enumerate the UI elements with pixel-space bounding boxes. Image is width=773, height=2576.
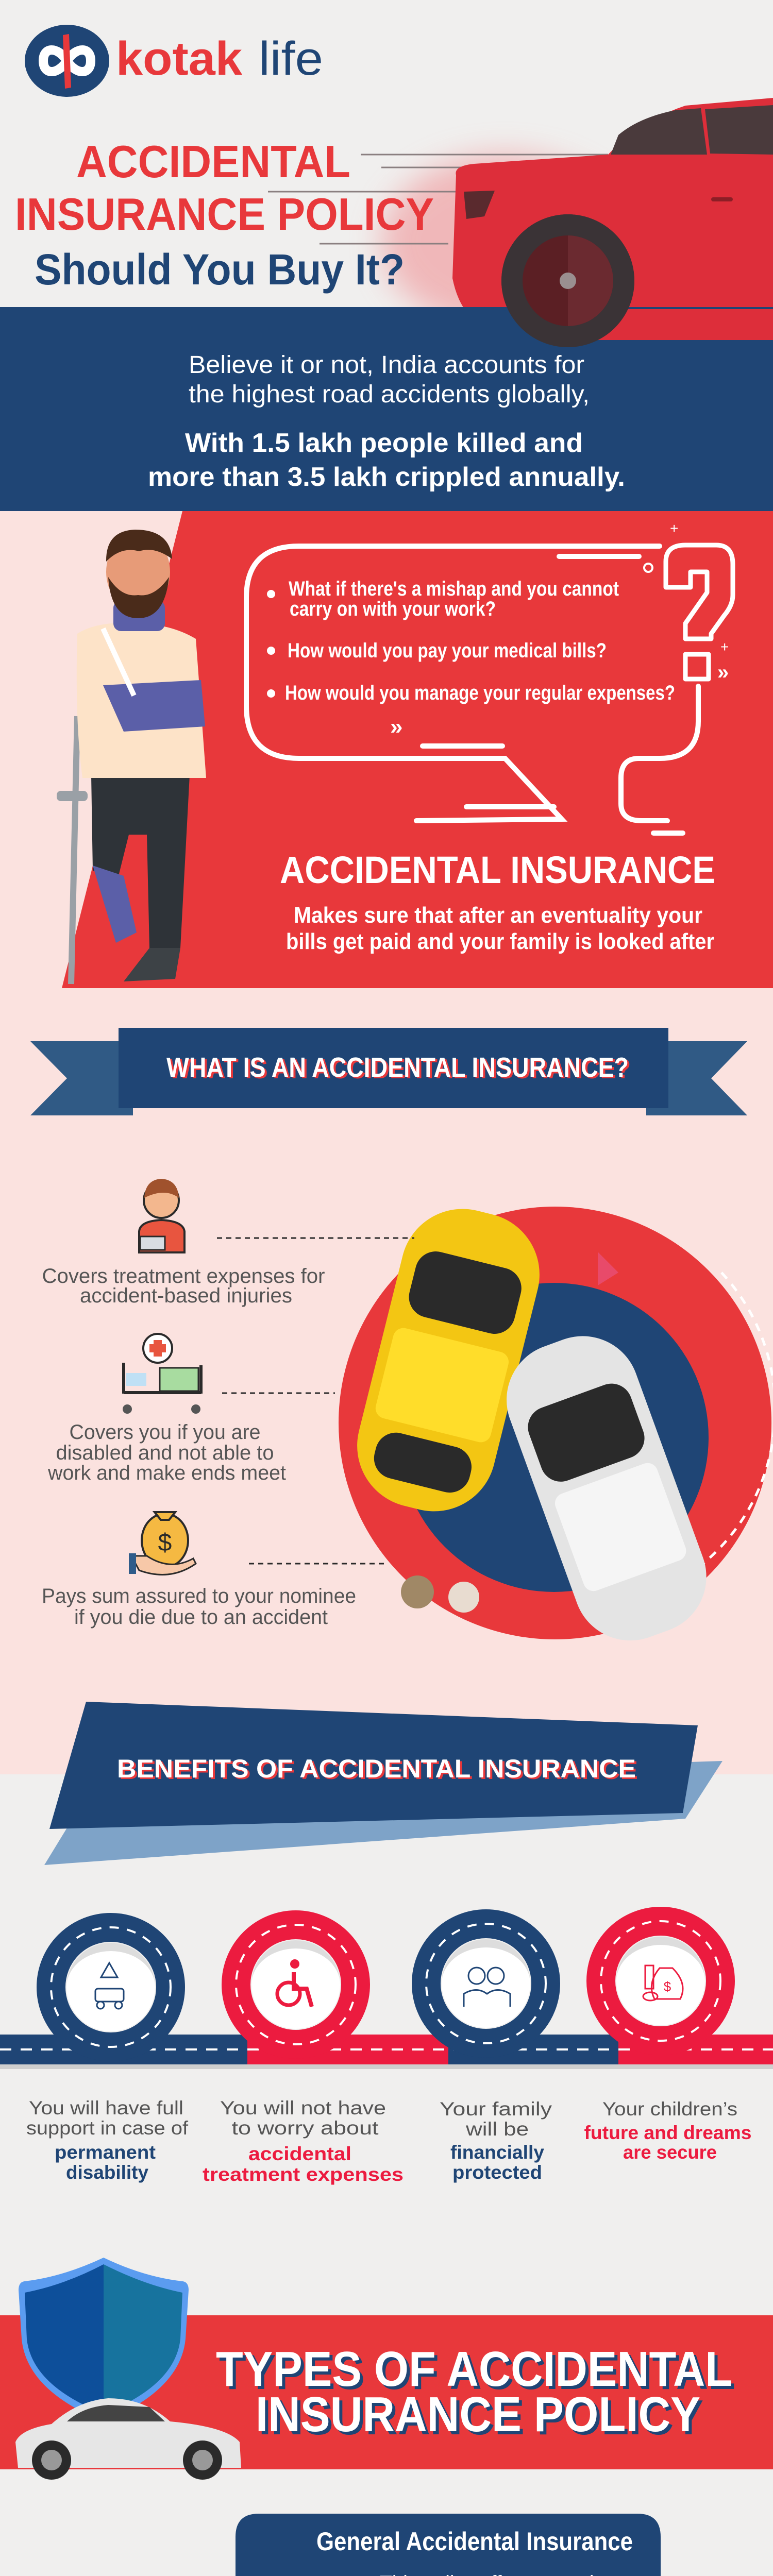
heading: benefits banner: BENEFITS OF ACCIDENTAL INSURANCE: [119, 1756, 638, 1785]
icon: hospital bed: [123, 1334, 201, 1414]
ribbon heading: what is an accidental insurance: WHAT IS AN ACCIDENTAL INSURANCE?: [166, 1052, 629, 1083]
re-draw car wheel over band: [501, 214, 773, 347]
heading: benefits banner: [44, 1702, 722, 1865]
benefit texts: future and dreams: [584, 2122, 751, 2143]
benefit texts: accidental: [248, 2143, 351, 2164]
logo: kotak life: [25, 25, 323, 97]
item: treatment expenses: accident-based injuries: [80, 1284, 292, 1307]
heading: types of accidental insurance policy: INSURANCE POLICY: [256, 2387, 700, 2442]
icon: shield: [19, 2258, 189, 2421]
panel: accidental insurance questions: +: [720, 639, 729, 655]
panel: accidental insurance questions: [57, 511, 773, 988]
benefit texts: permanent: [55, 2142, 156, 2163]
heading: benefits banner: BENEFITS OF ACCIDENTAL INSURANCE: [117, 1754, 636, 1783]
benefit texts: will be: [465, 2119, 529, 2140]
benefit texts: financially: [450, 2142, 544, 2163]
benefit texts: protected: [452, 2162, 542, 2183]
illustration: red car: [268, 98, 773, 347]
speech bubble: [246, 546, 698, 833]
benefit texts: Your family: [440, 2098, 552, 2120]
question list: [267, 578, 675, 704]
illustration: injured man: [57, 530, 206, 984]
backgrounds: [0, 0, 773, 309]
logo: kotak life: kotak: [116, 32, 243, 85]
benefit texts: Your children’s: [602, 2098, 737, 2120]
question list: carry on with your work?: [290, 598, 496, 620]
item: sum assured: Pays sum assured to your nominee: [42, 1585, 356, 1607]
benefit texts: to worry about: [232, 2117, 379, 2139]
icon: question mark: [666, 545, 733, 679]
question list: What if there's a mishap and you cannot: [289, 578, 619, 600]
ribbon heading: what is an accidental insurance: WHAT IS AN ACCIDENTAL INSURANCE?: [169, 1054, 631, 1084]
benefit texts: treatment expenses: [203, 2164, 404, 2185]
benefit texts: [26, 2097, 751, 2185]
item: treatment expenses: Covers treatment expenses for: [42, 1265, 325, 1287]
heading: types of accidental insurance policy: [0, 2258, 773, 2480]
heading: accidental insurance: ACCIDENTAL INSURANCE: [280, 849, 715, 891]
heading: accidental insurance: [280, 849, 715, 954]
item: disability cover: work and make ends meet: [47, 1462, 286, 1484]
item: disability cover: Covers you if you are: [69, 1421, 261, 1444]
road loops: [0, 1921, 773, 2069]
benefit texts: You will not have: [220, 2097, 386, 2119]
intro band: the highest road accidents globally,: [189, 381, 590, 408]
panel: accidental insurance questions: »: [390, 714, 402, 739]
benefit texts: are secure: [623, 2142, 717, 2163]
item: sum assured: [42, 1512, 387, 1629]
benefit loop 4: $: [664, 1979, 671, 1994]
title: ACCIDENTAL: [76, 136, 350, 187]
intro band: With 1.5 lakh people killed and: [185, 428, 583, 458]
intro band: Believe it or not, India accounts for: [189, 351, 584, 379]
intro band: more than 3.5 lakh crippled annually.: [148, 462, 625, 492]
benefit loop 4: [601, 1921, 720, 2041]
ribbon heading: what is an accidental insurance: [30, 1028, 747, 1115]
illustration: car crash circle: [339, 1196, 773, 1656]
title: [15, 136, 434, 294]
panel: accidental insurance questions: +: [670, 520, 678, 536]
item: disability cover: disabled and not able to: [56, 1442, 274, 1464]
item: sum assured: if you die due to an accident: [74, 1606, 328, 1629]
benefit texts: You will have full: [29, 2097, 183, 2119]
title: Should You Buy It?: [35, 245, 405, 294]
icon: white car: [15, 2398, 241, 2480]
icon: money bag: $: [158, 1529, 172, 1556]
icon: money bag: [129, 1512, 196, 1574]
card: general accidental insurance: General Accidental Insurance: [316, 2527, 633, 2556]
item: disability cover: [47, 1334, 335, 1484]
title: INSURANCE POLICY: [15, 189, 434, 240]
benefit texts: disability: [66, 2162, 148, 2183]
question list: How would you manage your regular expenses?: [285, 682, 675, 704]
benefit texts: support in case of: [26, 2117, 189, 2139]
benefit loop 2: [236, 1925, 356, 2044]
benefit loop 3: [426, 1924, 546, 2043]
panel: accidental insurance questions: »: [717, 661, 729, 684]
heading: types of accidental insurance policy: INSURANCE POLICY: [259, 2390, 703, 2445]
logo: kotak life: life: [259, 32, 323, 85]
item: treatment expenses: [42, 1179, 414, 1307]
question list: How would you pay your medical bills?: [288, 639, 607, 662]
icon: injured person: [139, 1179, 184, 1252]
card: general accidental insurance: [202, 2514, 661, 2576]
intro band: [0, 307, 773, 511]
benefit loop 1: [51, 1927, 171, 2047]
heading: accidental insurance: bills get paid and your family is looked after: [286, 929, 714, 954]
heading: accidental insurance: Makes sure that after an eventuality your: [294, 903, 702, 928]
